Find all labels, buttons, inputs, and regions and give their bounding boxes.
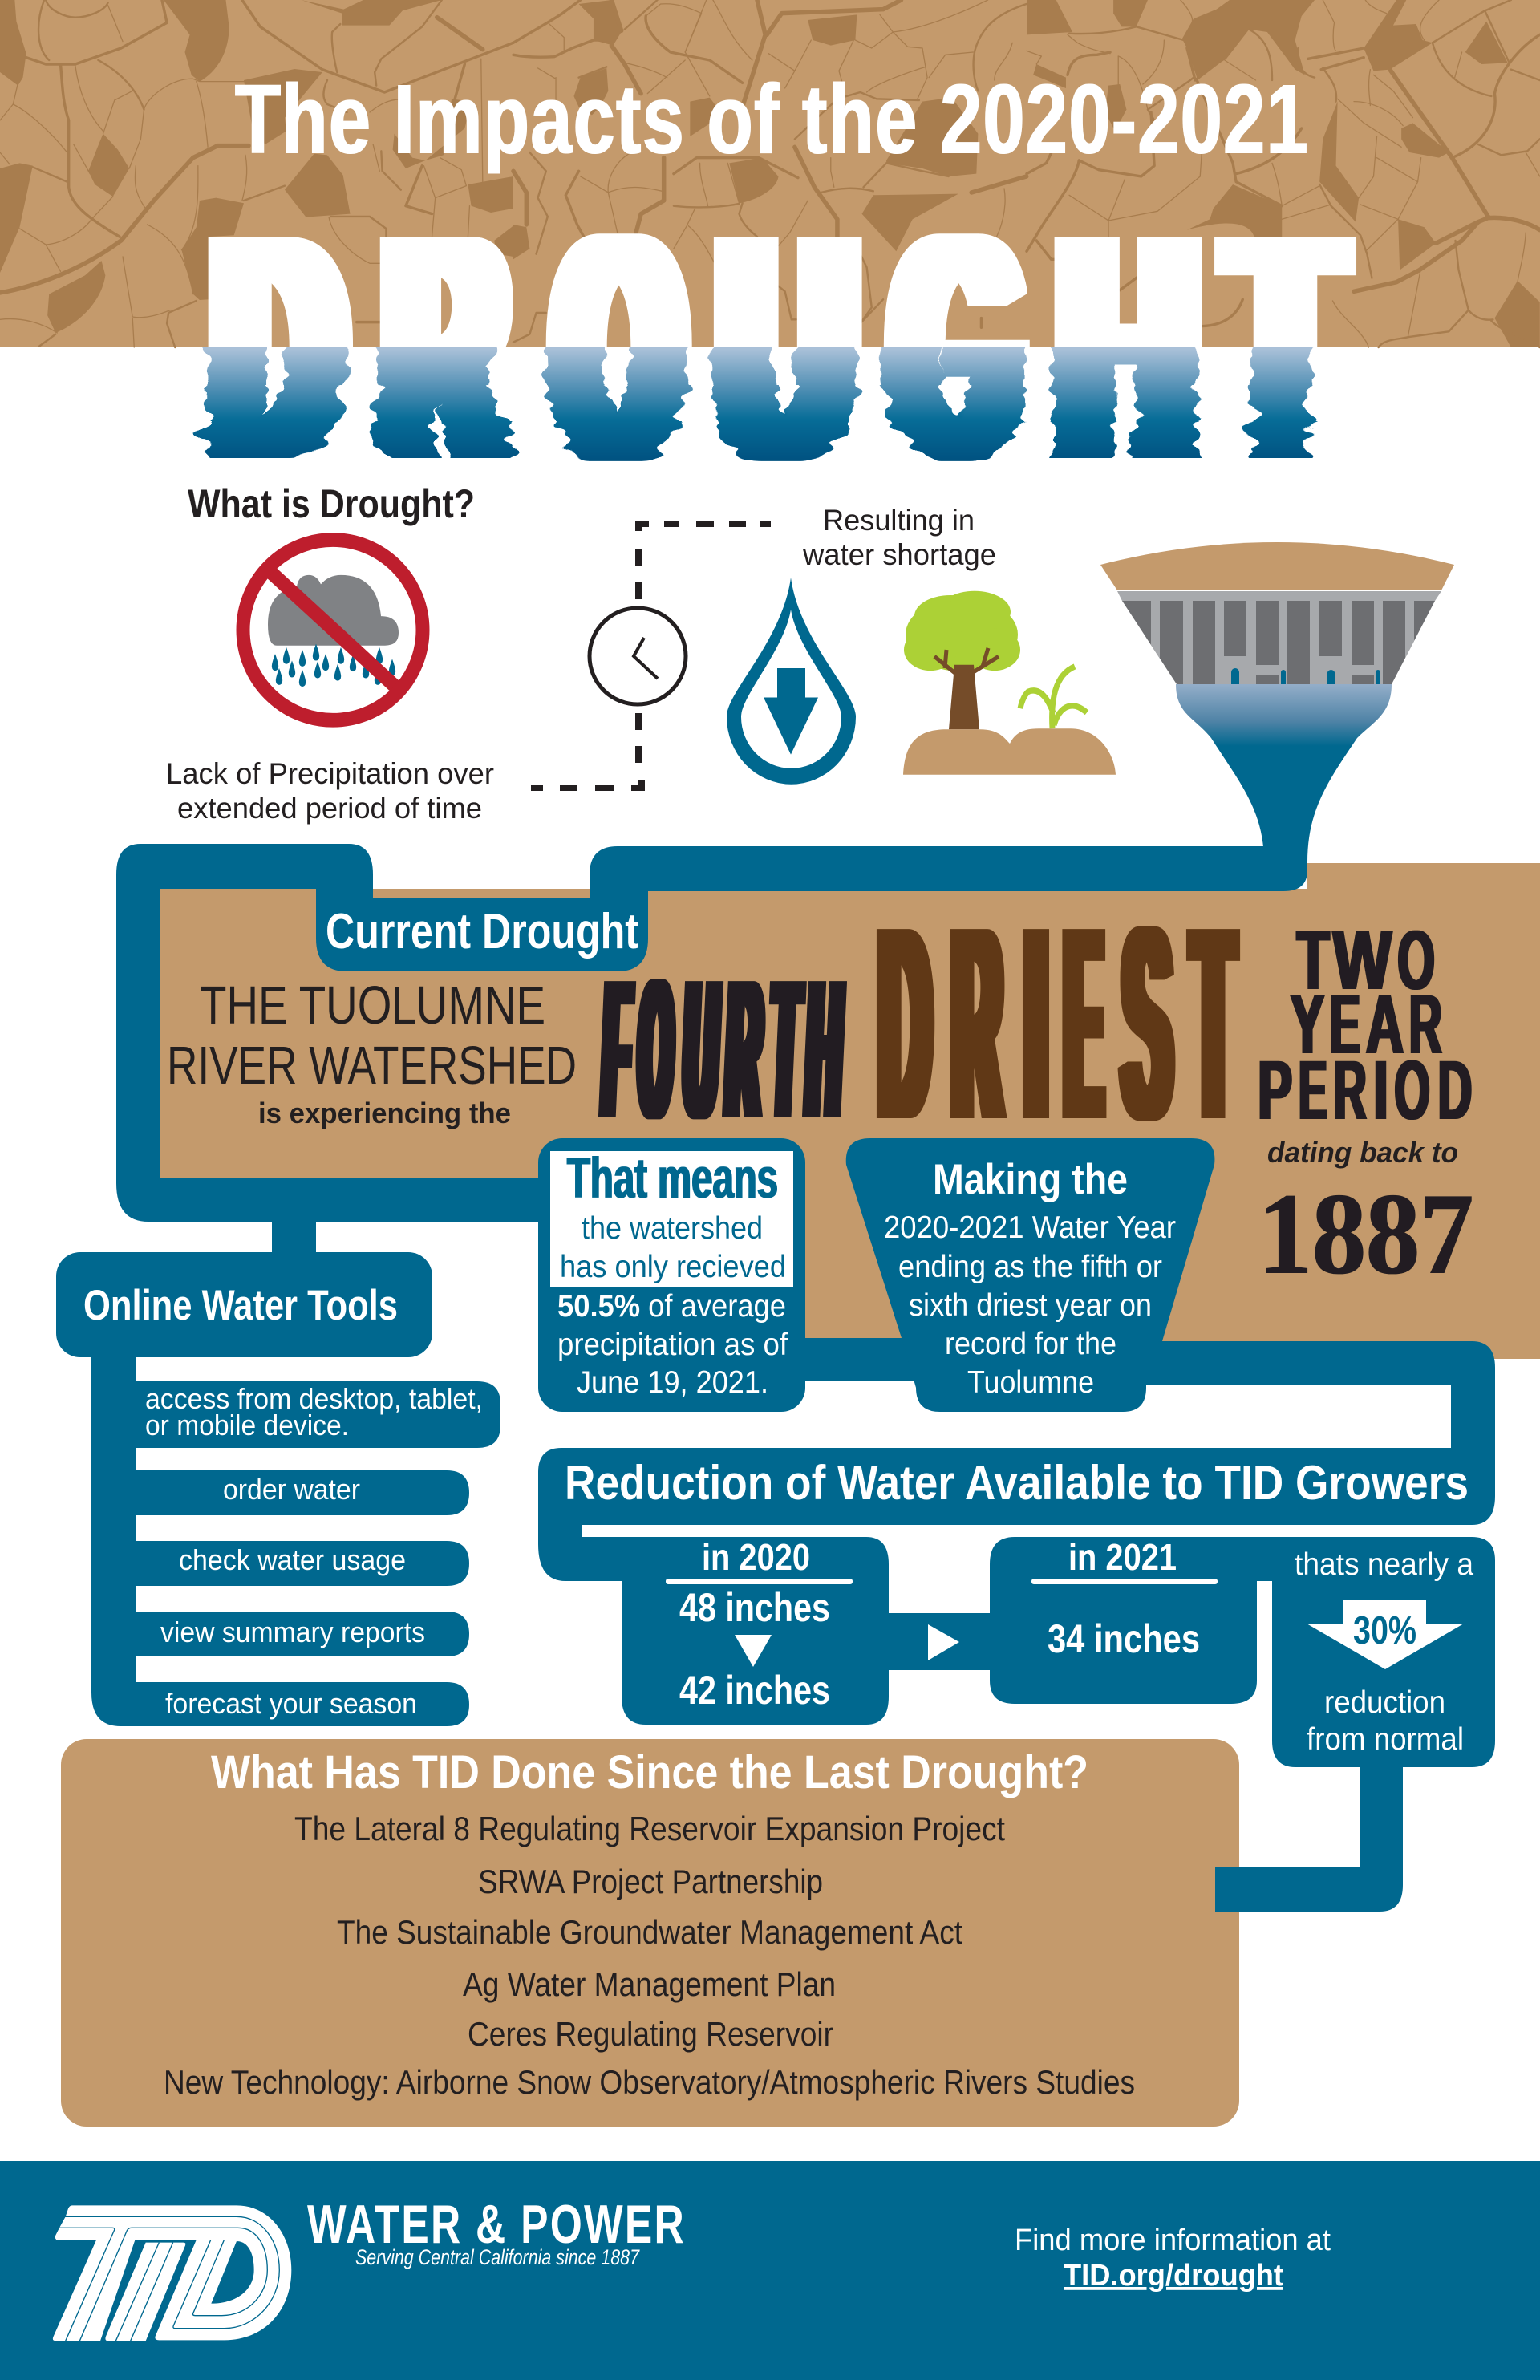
text: the tuolumne river watershed: RIVER WATERSHED [167,1036,577,1096]
panel: reduction of water available [538,1341,1495,1725]
panel: making the: 2020-2021 Water Year [884,1210,1176,1245]
footer band [0,2161,1540,2380]
DROUGHT word: water lower half: H [1058,169,1192,524]
panel: in 2021 and thirty percent reduction with outflow pipe: thats nearly a [1295,1547,1473,1582]
panel: reduction of water available: 42 inches [679,1668,830,1713]
heading: current drought: Current Drought [326,904,638,959]
big words: two year period: O [1395,1044,1430,1137]
DROUGHT word: water lower half: O [556,169,676,524]
big words: two year period: T [1297,914,1329,1008]
panel: in 2021 and thirty percent reduction with outflow pipe: reduction [1324,1685,1445,1720]
panel: that means: the watershed [582,1211,763,1246]
DROUGHT word: water lower half: H [1058,169,1192,524]
DROUGHT word: water lower half: D [213,169,338,524]
panel: making the [846,1138,1214,1412]
tool: order water [132,1470,469,1515]
panel: making the: Tuolumne [967,1365,1094,1400]
text: H [807,939,841,1158]
tool: check water usage [132,1541,469,1586]
DROUGHT word: water lower half: T [1228,169,1335,524]
panel: that means: has only recieved [560,1250,786,1284]
DROUGHT word: water lower half: G [893,169,1016,524]
DROUGHT word: water lower half: H [1058,169,1192,524]
panel: in 2021 and thirty percent reduction with outflow pipe: 30% [1353,1609,1416,1652]
text: is experiencing the: is experiencing the [258,1097,511,1129]
panel: that means: That means [567,1147,778,1210]
pipe: main blue outline with current drought tab [116,834,1307,1222]
tool: access [132,1381,500,1448]
panel: making the: Making the [933,1156,1128,1203]
DROUGHT word: water lower half: D [213,169,338,524]
icon: water drop with down arrow [727,578,856,785]
icon: clock [590,608,686,704]
text: resulting in water shortage: Resulting in [823,504,975,537]
text: resulting in water shortage: water shortage [802,538,996,571]
big word: fourth: U [684,939,718,1158]
DROUGHT word: water lower half: U [719,169,850,524]
panel: what has tid done: The Sustainable Groundwater Management Act [337,1913,962,1951]
big word: driest: R [953,871,1001,1176]
text: resulting in water shortage [802,504,996,571]
big words: two year period: P [1258,1044,1292,1137]
panel: in 2021 and thirty percent reduction with outflow pipe: from normal [1307,1722,1464,1757]
header: cracked earth background [0,0,1540,347]
panel: what has tid done: Ag Water Management Plan [463,1965,836,2003]
text: dating back to: dating back to [1267,1136,1458,1169]
tool: forecast your season: forecast your season [165,1687,417,1720]
panel: online water tools: Online Water Tools [83,1282,398,1329]
pipe: link between that means and making the [802,1338,922,1381]
DROUGHT word: water lower half: U [719,169,850,524]
panel: what has tid done: New Technology: Airborne Snow Observatory/Atmospheric Rivers Studies [164,2063,1135,2101]
tool: check water usage: check water usage [179,1543,406,1576]
panel: what has tid done: The Lateral 8 Regulating Reservoir Expansion Project [294,1810,1005,1847]
panel: what has tid done: SRWA Project Partnership [478,1863,823,1900]
icon: no rain [243,540,423,720]
text: lack of precipitation: extended period of time [177,792,482,825]
DROUGHT word: water lower half [192,347,1318,461]
logo: TID striped mark [53,2205,291,2341]
panel: that means [538,1138,805,1412]
big word: driest: D [879,871,930,1176]
panel: in 2021 and thirty percent reduction with outflow pipe: 34 inches [1048,1616,1200,1661]
big words: two year period [1258,914,1472,1137]
DROUGHT word: water lower half: O [556,169,676,524]
big word: driest: I [1024,871,1048,1176]
DROUGHT word: water lower half: D [213,169,338,524]
panel: making the: sixth driest year on [909,1288,1152,1323]
text: lack of precipitation: Lack of Precipitation over [166,757,494,790]
big word: fourth: R [727,939,760,1158]
DROUGHT word: dry upper half: O [559,169,679,524]
arrow: 2020 to 2021 connector [886,1613,993,1670]
DROUGHT word: water lower half: T [1228,169,1335,524]
DROUGHT word: dry upper half [209,233,1357,347]
panel: online water tools [56,1219,500,1726]
big word: driest: E [1066,871,1101,1176]
big words: two year period: W [1333,914,1392,1008]
text: T [1193,871,1234,1176]
big word: fourth: T [772,939,801,1158]
panel: making the: record for the [945,1327,1116,1361]
big word: fourth: O [639,939,671,1158]
panel: what has tid done: What Has TID Done Since the Last Drought? [211,1746,1088,1798]
big words: two year period: I [1373,1044,1388,1137]
footer: more information: Find more information at [1015,2224,1331,2257]
tool: access: access from desktop, tablet, [145,1382,483,1415]
big words: two year period: R [1334,1044,1367,1137]
DROUGHT word: water lower half: G [893,169,1016,524]
DROUGHT word: dry upper half: R [389,169,503,524]
panel: reduction of water available: 48 inches [679,1585,830,1630]
DROUGHT word: dry upper half: T [1232,169,1339,524]
panel: that means: 50.5% of average [557,1289,786,1324]
panel: that means: June 19, 2021. [577,1365,768,1400]
big word: fourth: F [603,939,630,1158]
icon: reservoir dam funnel [1100,542,1454,862]
text: the tuolumne river watershed: THE TUOLUMNE [200,975,545,1036]
DROUGHT word: dry upper half: G [897,169,1020,524]
big words: two year period: O [1397,914,1435,1008]
panel: what has tid done: Ceres Regulating Reservoir [468,2015,833,2053]
DROUGHT word: water lower half: T [1228,169,1335,524]
tagline: Serving Central California since 1887 [355,2245,640,2269]
DROUGHT word: dry upper half: U [722,169,853,524]
brand: water and power: WATER & POWER [307,2194,686,2255]
DROUGHT word: water lower half: U [719,169,850,524]
DROUGHT word: water lower half: R [385,169,499,524]
big words: two year period: R [1409,978,1442,1072]
panel: making the: ending as the fifth or [898,1250,1162,1284]
dashed timeline arrow [531,524,771,788]
DROUGHT word: water lower half: O [556,169,676,524]
big words: two year period: E [1299,1044,1327,1137]
panel: in 2021 and thirty percent reduction with outflow pipe: in 2021 [1068,1536,1177,1578]
DROUGHT word: water lower half: G [893,169,1016,524]
DROUGHT word: water lower half: R [385,169,499,524]
panel: what has tid done [61,1739,1239,2127]
heading: what is drought: What is Drought? [188,481,475,526]
footer: more information: TID.org/drought [1064,2259,1283,2293]
tool: access: or mobile device. [145,1409,349,1441]
DROUGHT word: water lower half: R [385,169,499,524]
tool: order water: order water [223,1473,360,1506]
DROUGHT word: dry upper half: D [216,169,341,524]
tool: view summary reports: view summary reports [160,1616,425,1648]
big words: two year period: E [1330,978,1360,1072]
panel: reduction of water available: in 2020 [702,1536,810,1578]
big words: two year period: Y [1291,978,1324,1072]
panel: tan current drought background [160,863,1540,1359]
DROUGHT word: dry upper half: H [1061,169,1195,524]
text: lack of precipitation [166,757,494,825]
text: the tuolumne river watershed [167,975,577,1096]
panel: that means: precipitation as of [557,1328,788,1362]
icon: tree and sprout on soil [903,591,1116,775]
big words: two year period: D [1438,1044,1472,1137]
tool: forecast your season [132,1682,469,1726]
panel: in 2021 and thirty percent reduction with outflow pipe [990,1536,1495,1912]
tool: view summary reports [132,1612,469,1656]
year 1887: 1887 [1258,1169,1473,1299]
footer: more information [1015,2224,1331,2293]
big words: two year period: A [1366,978,1404,1072]
big word: driest: S [1123,871,1171,1176]
